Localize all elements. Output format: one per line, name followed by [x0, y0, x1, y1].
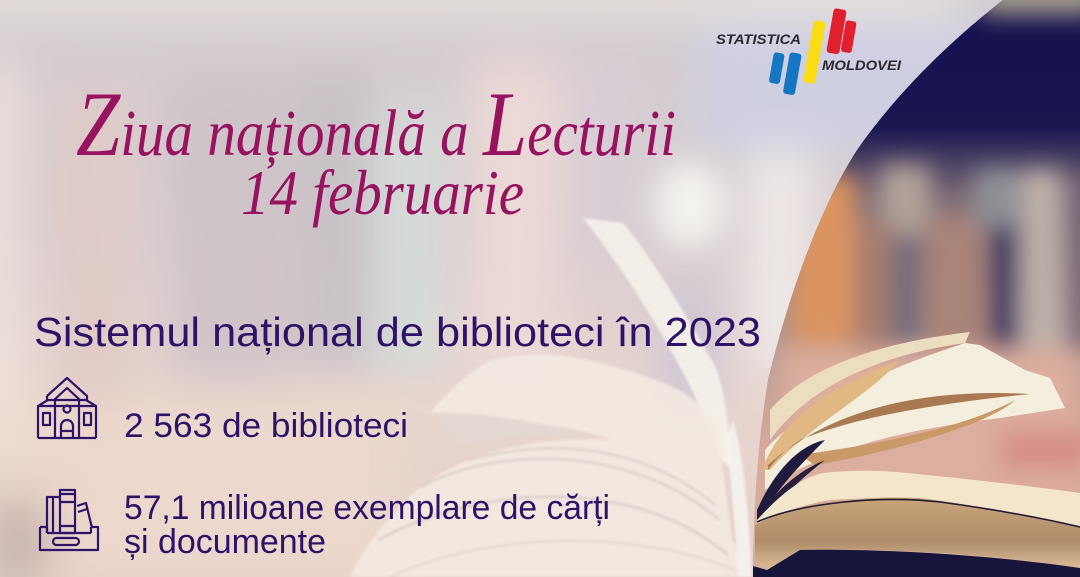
illustration: lower book block: [757, 471, 1080, 528]
title: 14 februarie: [241, 157, 524, 228]
logo bars: [769, 8, 857, 95]
icon: library building: [38, 378, 96, 438]
title: [76, 73, 676, 228]
heading: Sistemul național de biblioteci în 2023: [34, 309, 761, 355]
blurred shelves: [780, 0, 1080, 490]
text: collections: [124, 489, 610, 561]
icon: books in tray: [40, 490, 98, 550]
logo: Statistica Moldovei: [716, 8, 902, 95]
panel: book photograph: [740, 0, 1080, 577]
illustration: curling pages: [770, 332, 970, 440]
text: collections: 57,1 milioane exemplare de cărți: [124, 489, 610, 527]
text: collections: și documente: [124, 523, 326, 561]
illustration: faded open book: [350, 218, 752, 577]
text: libraries: 2 563 de biblioteci: [124, 407, 408, 445]
logo text: STATISTICA: [716, 31, 801, 47]
logo: Statistica Moldovei: MOLDOVEI: [822, 57, 902, 73]
background: bright blur: [654, 161, 726, 249]
title: Ziua națională a Lecturii: [76, 73, 676, 175]
